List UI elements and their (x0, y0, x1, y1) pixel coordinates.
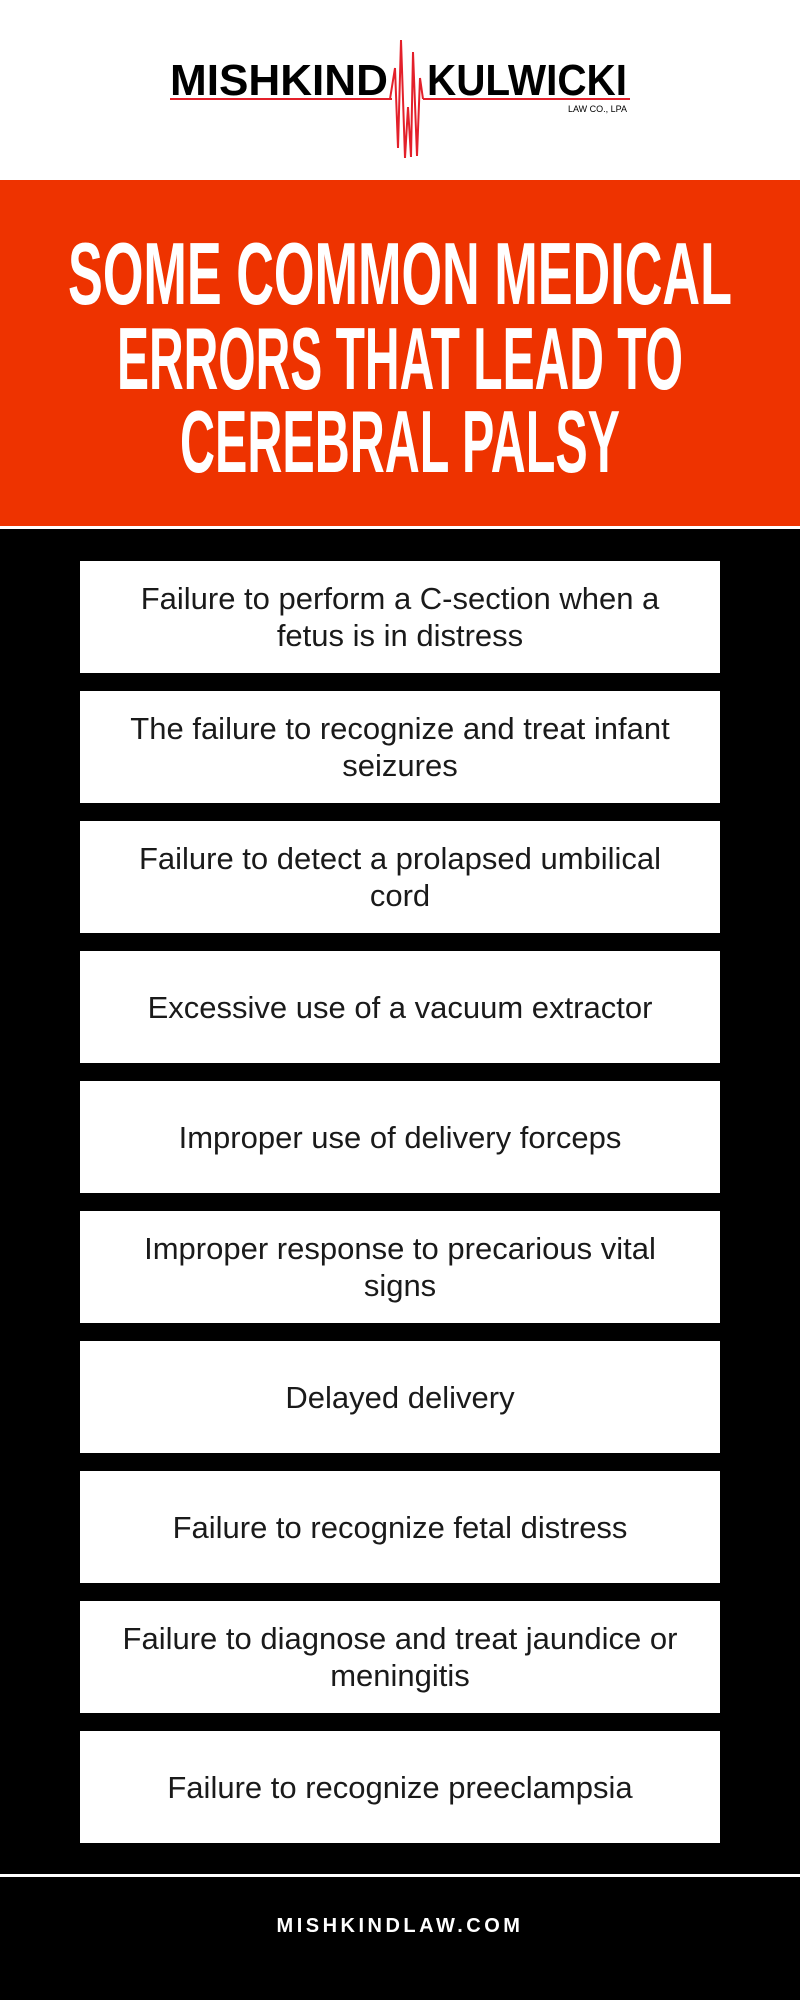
logo (170, 40, 630, 158)
item 4: Excessive use of a vacuum extractor (148, 990, 652, 1024)
item 2 (80, 691, 720, 803)
logo: LAW CO., LPA (568, 104, 627, 114)
item 4 (80, 951, 720, 1063)
title (68, 224, 732, 491)
logo: MISHKIND (170, 56, 388, 105)
item 8: Failure to recognize fetal distress (173, 1510, 627, 1544)
footer url: MISHKINDLAW.COM (277, 1915, 523, 1937)
item 10 (80, 1731, 720, 1843)
item 10: Failure to recognize preeclampsia (167, 1770, 633, 1804)
header: logo (0, 0, 800, 180)
item 6: Improper response to precarious vital (144, 1231, 656, 1266)
logo: KULWICKI (427, 56, 627, 105)
item 7 (80, 1341, 720, 1453)
item 3: cord (370, 878, 430, 913)
item 5: Improper use of delivery forceps (179, 1120, 621, 1154)
item 5 (80, 1081, 720, 1193)
item 9: Failure to diagnose and treat jaundice or (123, 1621, 677, 1656)
title band (0, 180, 800, 526)
item 2: The failure to recognize and treat infant (130, 711, 670, 746)
item 6 (80, 1211, 720, 1323)
item 9 (80, 1601, 720, 1713)
item 9: meningitis (330, 1658, 470, 1693)
item 3 (80, 821, 720, 933)
item 3: Failure to detect a prolapsed umbilical (139, 841, 661, 876)
item 1: fetus is in distress (277, 618, 523, 653)
item 1: Failure to perform a C-section when a (141, 581, 659, 616)
item 6: signs (364, 1268, 436, 1303)
item 7: Delayed delivery (285, 1380, 515, 1414)
item 2: seizures (342, 748, 458, 783)
item 8 (80, 1471, 720, 1583)
item 1 (80, 561, 720, 673)
